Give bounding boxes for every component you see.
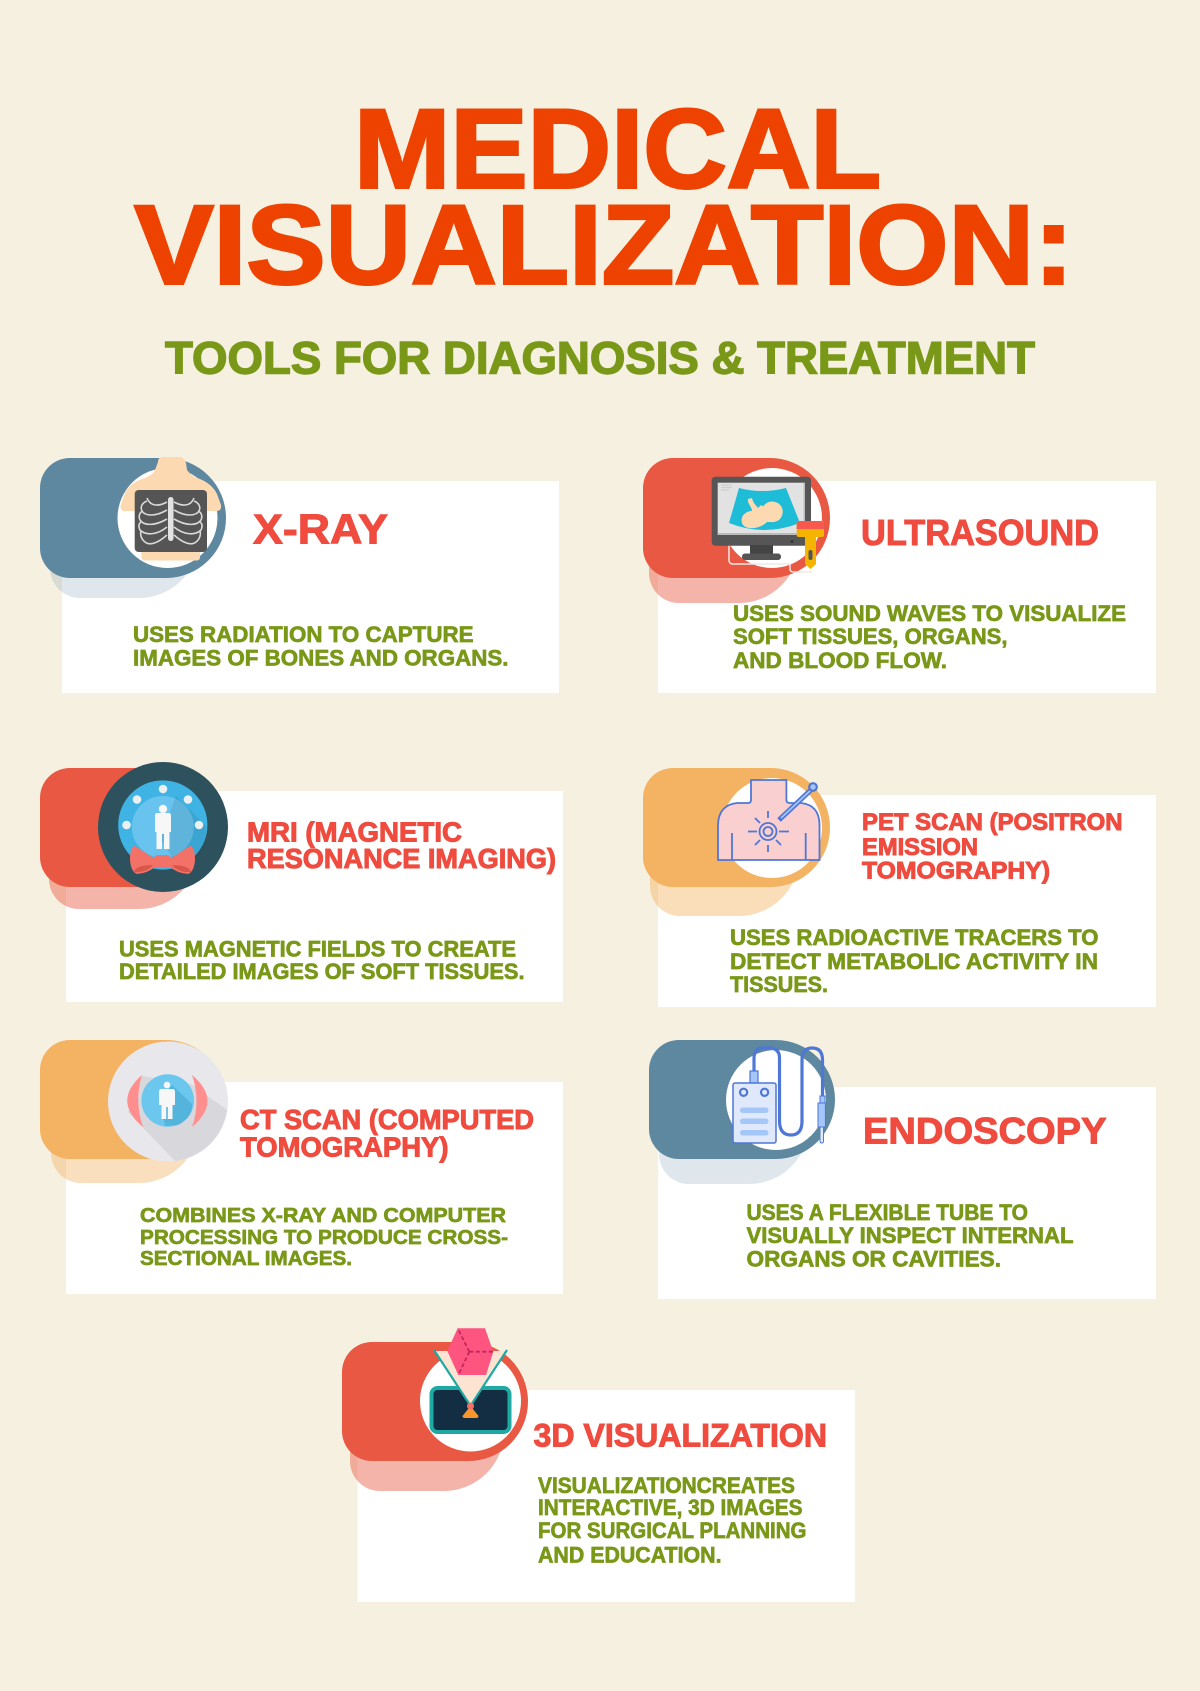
- icon: ultrasound monitor and probe: [712, 477, 824, 572]
- panel: mri: [40, 762, 563, 1002]
- title: [134, 86, 1074, 308]
- panel: 3d visualization: [342, 1328, 855, 1602]
- description: mri: USES MAGNETIC FIELDS TO CREATE: [119, 936, 516, 962]
- badge: mri: [40, 768, 226, 909]
- icon: ct scanner: [108, 1042, 228, 1162]
- heading: pet scan: TOMOGRAPHY): [862, 858, 1050, 884]
- description: pet scan: [730, 925, 1098, 997]
- badge: 3d visualization: [342, 1342, 528, 1491]
- badge: ct scan: [40, 1040, 226, 1183]
- description: pet scan: USES RADIOACTIVE TRACERS TO: [730, 925, 1098, 950]
- description: x-ray: IMAGES OF BONES AND ORGANS.: [133, 646, 508, 670]
- icon: pet scan torso: [718, 780, 820, 860]
- icon: chest x-ray: [120, 457, 221, 560]
- description: endoscopy: USES A FLEXIBLE TUBE TO: [746, 1200, 1028, 1225]
- description: x-ray: USES RADIATION TO CAPTURE: [133, 622, 474, 647]
- icon: endoscope: [733, 1048, 825, 1143]
- heading: pet scan: EMISSION: [862, 834, 978, 861]
- heading: ct scan: TOMOGRAPHY): [240, 1132, 448, 1162]
- description: ultrasound: [733, 601, 1126, 673]
- description: pet scan: TISSUES.: [730, 972, 828, 997]
- description: ultrasound: SOFT TISSUES, ORGANS,: [733, 624, 1008, 649]
- description: 3d visualization: FOR SURGICAL PLANNING: [538, 1518, 806, 1543]
- icon: 3d hologram: [432, 1328, 510, 1432]
- heading: ct scan: [240, 1104, 534, 1162]
- description: 3d visualization: INTERACTIVE, 3D IMAGES: [538, 1495, 802, 1520]
- badge: pet scan: [643, 768, 830, 916]
- description: pet scan: DETECT METABOLIC ACTIVITY IN: [730, 949, 1098, 974]
- heading: mri: [247, 816, 556, 874]
- heading: pet scan: [862, 809, 1122, 884]
- heading: endoscopy: ENDOSCOPY: [863, 1110, 1106, 1152]
- panel: pet scan: [643, 768, 1156, 1007]
- panel: endoscopy: [649, 1040, 1156, 1299]
- heading: mri: RESONANCE IMAGING): [247, 843, 556, 874]
- heading: 3d visualization: 3D VISUALIZATION: [534, 1418, 827, 1454]
- panel: ultrasound: [643, 458, 1156, 693]
- description: ultrasound: USES SOUND WAVES TO VISUALIZE: [733, 601, 1126, 626]
- heading: x-ray: X-RAY: [253, 506, 388, 552]
- description: ct scan: PROCESSING TO PRODUCE CROSS-: [140, 1226, 508, 1249]
- description: 3d visualization: [538, 1473, 806, 1568]
- title: VISUALIZATION:: [134, 182, 1074, 308]
- description: ct scan: [140, 1204, 508, 1270]
- description: x-ray: [133, 622, 508, 670]
- heading: ct scan: CT SCAN (COMPUTED: [240, 1104, 534, 1135]
- description: ultrasound: AND BLOOD FLOW.: [733, 648, 947, 673]
- description: ct scan: SECTIONAL IMAGES.: [140, 1247, 352, 1270]
- badge: ultrasound: [643, 458, 830, 603]
- heading: mri: MRI (MAGNETIC: [247, 816, 462, 848]
- badge: x-ray: [40, 458, 226, 598]
- badge: endoscopy: [649, 1040, 835, 1184]
- panel: ct scan: [40, 1040, 563, 1294]
- heading: ultrasound: ULTRASOUND: [861, 512, 1099, 553]
- heading: pet scan: PET SCAN (POSITRON: [862, 809, 1122, 836]
- icon: mri scanner: [98, 762, 228, 892]
- description: mri: DETAILED IMAGES OF SOFT TISSUES.: [119, 959, 524, 984]
- description: endoscopy: [746, 1200, 1074, 1272]
- description: ct scan: COMBINES X-RAY AND COMPUTER: [140, 1204, 506, 1227]
- description: 3d visualization: VISUALIZATIONCREATES: [538, 1473, 795, 1498]
- description: 3d visualization: AND EDUCATION.: [538, 1542, 722, 1568]
- description: endoscopy: VISUALLY INSPECT INTERNAL: [746, 1223, 1074, 1248]
- subtitle: TOOLS FOR DIAGNOSIS & TREATMENT: [165, 332, 1035, 384]
- description: mri: [119, 936, 524, 984]
- title: MEDICAL: [354, 86, 881, 212]
- description: endoscopy: ORGANS OR CAVITIES.: [746, 1246, 1001, 1272]
- panel: x-ray: [40, 457, 559, 693]
